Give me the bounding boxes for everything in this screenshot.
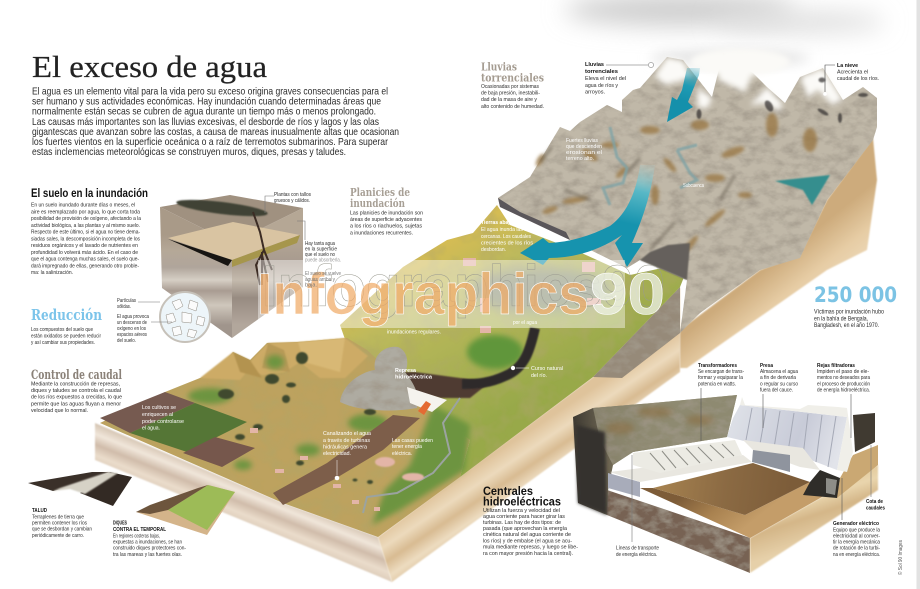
text: diques: tra las mareas y las fuertes olas.: [113, 552, 182, 558]
heading: centrales: Centrales: [483, 484, 533, 498]
label: presa: o regular su curso: [760, 382, 798, 388]
soil right face: [232, 208, 303, 338]
text: centrales: [483, 508, 578, 557]
label: transformadores: Se encargan de trans-: [698, 369, 744, 375]
heading: suelo: El suelo en la inundación: [31, 188, 148, 200]
illustration: soil cube: [160, 195, 305, 338]
label: generador eléctrico: Generador eléctrico: [833, 521, 879, 527]
snow haze on peaks: [655, 48, 843, 112]
strata: upper right face: [680, 138, 877, 368]
text: reducción: y así cambiar sus propiedades.: [31, 340, 95, 346]
title: El exceso de agua: [32, 49, 267, 84]
callout: la nieve: Acrecienta el: [837, 70, 868, 76]
label: transformadores: Transformadores: [698, 363, 737, 369]
label: generador eléctrico: Equipo que produce la: [833, 528, 881, 534]
dam wall: [727, 405, 847, 470]
label: cultivos: [142, 405, 184, 432]
intro text: El agua es un elemento vital para la vida pero su exceso origina graves consecuencias para el: [32, 86, 388, 98]
strata: front left face: [95, 423, 392, 582]
labels: soil cube: gruesos y cálidos.: [274, 198, 310, 204]
label: presa: [760, 363, 799, 428]
label: tierras abajo: Tierras abajo: [481, 220, 513, 226]
text: control de caudal: de los ríos expuestos a crecidas, lo que: [31, 395, 122, 401]
illustration: hydroelectric plant: [573, 395, 878, 573]
top layer: [160, 195, 303, 243]
labels: soil cube: El agua provoca: [117, 314, 149, 320]
labels: soil cube: Hay tanta agua: [305, 241, 335, 247]
callout: lluvias torrenciales: Eleva el nivel del: [585, 76, 626, 82]
text: lluvias torrenciales: alto contenido de humedad.: [481, 104, 544, 110]
concrete block: [608, 473, 640, 497]
label: cota de caudales: [866, 445, 885, 512]
label: mountain erosion: Fuertes lluvias: [566, 138, 598, 144]
text: big number: [814, 308, 884, 329]
text: suelo: profundidad lo volverá más ácido. En el caso de: [31, 250, 138, 256]
heading: planicies: [350, 185, 410, 210]
label: cultivos: Los cultivos se: [142, 405, 176, 411]
text: suelo: posibilidad de provisión de oxígeno, afectando a la: [31, 216, 142, 222]
label: transformadores: formar y equiparar la: [698, 375, 744, 381]
text: centrales: mula mediante represas, y luego se libe-: [483, 544, 578, 550]
crop field: brown lower: [183, 437, 255, 467]
text: big number: en la bahía de Bengala,: [814, 316, 868, 322]
small dam: [407, 387, 447, 412]
text: talud: Terraplenes de tierra que: [32, 514, 84, 520]
houses: [250, 258, 601, 511]
dark ridges: [540, 147, 735, 250]
watermark: Infographics: [257, 262, 589, 327]
label: curso natural: Curso natural: [531, 366, 563, 372]
label: cultivos: poder controlarse: [142, 419, 184, 425]
intro text: ser humano y sus actividades económicas. Hay inundación cuando determinadas áreas que: [32, 97, 381, 108]
label: transformadores: [698, 363, 744, 441]
text: lluvias torrenciales: Ocasionadas por sistemas: [481, 84, 539, 90]
text: diques: DIQUES: [113, 520, 127, 526]
label: cultivos: el agua.: [142, 426, 160, 432]
intro text: los fuertes vientos en la superficie oceánica o a raíz de terremotos submarinos. Para superar: [32, 137, 388, 148]
dam rocks: [340, 347, 418, 410]
callout: lluvias torrenciales: Lluvias: [585, 62, 604, 68]
label: presa: a fin de derivarla: [760, 375, 797, 381]
callout: lluvias torrenciales: [585, 62, 654, 96]
label: turbinas: Canalizando el agua: [323, 431, 372, 437]
text: centrales: ra con mayor presión hacia la central).: [483, 551, 573, 557]
text: planicies: Las planicies de inundación son: [350, 210, 423, 216]
cut surface: [168, 222, 300, 260]
text: suelo: [31, 203, 142, 276]
text: planicies: a los ríos o riachuelos, sujetas: [350, 224, 422, 230]
heading: control de caudal: Control de caudal: [31, 368, 122, 383]
text: diques: construido diques protectores con-: [113, 546, 186, 552]
text: talud: TALUD: [32, 508, 47, 514]
text: reducción: [31, 327, 101, 346]
label: rejas: [817, 363, 871, 438]
trees: [218, 352, 376, 484]
label: turbinas: a través de turbinas: [323, 438, 370, 444]
plant label leader: [265, 196, 274, 213]
heading: lluvias torrenciales: [481, 60, 544, 85]
text: reducción: están oxidados se pueden reducir: [31, 334, 101, 340]
glacial lake: [775, 175, 830, 205]
label: tierras abajo: [481, 220, 537, 253]
text: suelo: actividad biológica, a las plantas y al mismo suelo.: [31, 223, 140, 229]
label: rejas: mentos no deseados para: [817, 375, 871, 381]
callout: la nieve: La nieve: [837, 63, 858, 69]
text: talud: permiten contener los ríos: [32, 520, 87, 526]
label: mountain erosion: erosionan el: [566, 150, 602, 156]
label: transformadores: potencia en watts.: [698, 382, 736, 388]
text: centrales: Utilizan la fuerza y velocidad del: [483, 508, 560, 514]
labels on terrain: [142, 138, 705, 480]
rock mass: [573, 395, 737, 515]
soil left face: [160, 207, 232, 338]
labels: soil cube: [117, 192, 341, 344]
label: rejas: de energía hidroeléctrica.: [817, 388, 870, 394]
label: tierras abajo: desbordan.: [481, 247, 506, 253]
text: suelo: ma: la salinización.: [31, 270, 73, 276]
rock band along right edge of the plain: [593, 287, 680, 378]
brown eroded patches: [534, 113, 817, 256]
tree: [253, 212, 272, 285]
river: [462, 328, 535, 384]
wooden floor: [653, 463, 810, 515]
vegetation: [176, 196, 268, 220]
upstream channel: [395, 372, 490, 398]
label: turbinas: [323, 431, 372, 480]
text: suelo: aire es reemplazado por agua, lo que corta toda: [31, 210, 141, 216]
text: lluvias torrenciales: de baja presión, inestabili-: [481, 90, 540, 96]
white strip: [610, 455, 752, 482]
label: generador eléctrico: na en energía eléctrica.: [833, 552, 880, 558]
text: diques: expuestas a inundaciones, se han: [113, 540, 182, 546]
mountain streams: [603, 127, 697, 205]
label: tierras abajo: cercanas. Los caudales: [481, 234, 531, 240]
watermark: 90: [590, 262, 665, 327]
callout: lluvias torrenciales: torrenciales: [585, 69, 618, 75]
left farmland with hills: [100, 338, 470, 537]
label: represa: Represa: [395, 368, 417, 374]
label: líneas de transporte: [616, 455, 659, 558]
crop field: green: [130, 403, 247, 452]
text: control de caudal: velocidad que lo normal.: [31, 408, 88, 414]
label: flood plain: inundaciones regulares.: [387, 330, 441, 336]
intro text: estas inclemencias meteorológicas se construyen muros, diques, presas y taludes.: [32, 147, 346, 158]
intro text: gigantescas que avanzan sobre las costas, a causa de mareas inusualmente altas que ocasionan: [32, 127, 399, 138]
text: big number: Bangladesh, en el año 1970.: [814, 322, 879, 329]
label: represa: hidroeléctrica: [395, 374, 433, 380]
plain: green and yellow fields: [340, 205, 690, 477]
text: suelo: residuos orgánicos y el lavado de nutrientes en: [31, 243, 138, 249]
credit: © Sol 90 Images: [897, 540, 904, 575]
labels: soil cube: espacios aéreos: [117, 332, 147, 338]
callout: lluvias torrenciales: agua de ríos y: [585, 83, 618, 89]
right strata face: [750, 465, 878, 573]
dam crest and buttress: [740, 397, 853, 472]
heading: planicies: inundación: [350, 196, 405, 210]
black water wedge: [168, 239, 232, 266]
text: control de caudal: diques y taludes se controla el caudal: [31, 388, 121, 394]
dark recess: [853, 413, 875, 452]
illustration: flood plain terrain block: [95, 138, 877, 582]
heading: reducción: Reducción: [31, 306, 102, 324]
callout: lluvias torrenciales: arroyos.: [585, 90, 605, 96]
label: represa: [395, 368, 433, 380]
label: casas: Las casas pueden: [392, 438, 433, 444]
dark rock shade: [576, 425, 607, 515]
big number: 250 000: [814, 283, 897, 307]
labels: soil cube: del suelo.: [117, 338, 136, 344]
label: turbinas: electricidad.: [323, 451, 351, 457]
text: lluvias torrenciales: [481, 84, 544, 110]
talud illustration: [28, 472, 132, 506]
watermark: Infographics90: [262, 254, 665, 319]
label: rejas: Rejas filtradoras: [817, 363, 855, 369]
arrow: floods descending: [520, 165, 655, 267]
heading: centrales: hidroeléctricas: [483, 495, 561, 509]
right top plane: [640, 445, 878, 538]
strata: front right face: [378, 287, 680, 582]
dam outlet: [418, 401, 431, 415]
road stream: [363, 398, 460, 513]
text: control de caudal: [31, 382, 122, 414]
text: suelo: que el agua contenga muchas sales, el suelo que-: [31, 257, 139, 263]
label: tierras abajo: El agua inunda las áreas: [481, 227, 537, 233]
text: suelo: Respecto de este último, si el agua no tiene dema-: [31, 230, 140, 236]
label: líneas de transporte: de energía eléctrica.: [616, 552, 657, 558]
label: casas: [392, 438, 433, 457]
label: generador eléctrico: de rotación de la turbi-: [833, 546, 880, 552]
dark cut faces: [498, 198, 690, 280]
label: rejas: Impiden el paso de ele-: [817, 369, 869, 375]
text: centrales: turbinas. Las hay de dos tipos: de: [483, 520, 561, 526]
text: control de caudal: Mediante la construcción de represas,: [31, 382, 120, 388]
label: mountain erosion: [566, 138, 602, 162]
intro text: Las causas más importantes son las lluvias excesivas, el desborde de ríos y lagos y las olas: [32, 117, 379, 128]
grey intake block: [752, 450, 790, 472]
text: suelo: En un suelo inundado durante días o meses, el: [31, 203, 135, 209]
rocky peaks: [696, 78, 868, 123]
label: presa: Presa: [760, 363, 774, 369]
label: flood plain: [387, 320, 538, 336]
dam apron: [743, 440, 820, 470]
label: casas: eléctrica.: [392, 451, 412, 457]
brown mottling on rock: [606, 407, 714, 434]
clouds: [565, 0, 885, 66]
label: mountain erosion: que descienden: [566, 144, 602, 150]
text: centrales: pasada (que aprovechan la energía: [483, 526, 568, 532]
callout: la nieve: caudal de los ríos.: [837, 76, 879, 82]
labels: soil cube: un descenso de: [117, 320, 147, 326]
text: reducción: Los compuestos del suelo que: [31, 327, 93, 333]
text: diques: [113, 520, 186, 558]
label: cota de caudales: caudales: [866, 506, 885, 512]
label: casas: tener energía: [392, 444, 423, 450]
label: generador eléctrico: tir la energía mecánica: [833, 540, 881, 546]
label: rejas: el proceso de producción: [817, 382, 870, 388]
illustration: mountains: [498, 48, 877, 333]
text: talud: que se desbordan y cambian: [32, 526, 92, 532]
callout: la nieve: [823, 63, 879, 96]
cut channel: [273, 415, 420, 505]
labels: soil cube: que el suelo no: [305, 252, 335, 258]
crop field: brown upper: [100, 392, 195, 433]
label: curso natural: [511, 366, 563, 379]
label: mountain erosion: terreno alto.: [566, 156, 594, 162]
text: talud: periódicamente de carro.: [32, 533, 84, 539]
turbine generator: [803, 470, 840, 498]
flood water haze: [470, 268, 610, 312]
intro text: normalmente están secas se cubren de agua durante un tiempo más o menos prolongado.: [32, 107, 376, 118]
page edge strip: [916, 0, 920, 589]
label: líneas de transporte: Líneas de transporte: [616, 546, 659, 552]
text: centrales: agua corriente para hacer girar las: [483, 514, 565, 520]
label: subcuenca: Subcuenca: [683, 183, 705, 189]
intro text: [32, 86, 399, 158]
text: lluvias torrenciales: dad de la masa de aire y: [481, 97, 537, 103]
green patches: [188, 335, 523, 525]
labels: soil cube: aguas arriba y: [305, 277, 335, 283]
labels: soil cube: Partículas: [117, 298, 136, 304]
label: cota de caudales: Cota de: [866, 499, 883, 505]
text: planicies: a inundaciones recurrentes.: [350, 230, 413, 236]
label: generador eléctrico: [833, 478, 881, 558]
dike illustration: [136, 485, 235, 535]
hills: [200, 338, 368, 380]
text: talud: [32, 508, 92, 539]
labels: soil cube: oxígeno en los: [117, 326, 146, 332]
text: diques: CONTRA EL TEMPORAL: [113, 527, 166, 533]
heading: lluvias torrenciales: Lluvias: [481, 60, 517, 74]
label: generador eléctrico: electricidad al conver-: [833, 534, 880, 540]
label: presa: Almacena el agua: [760, 369, 799, 375]
power house: [633, 440, 742, 473]
front brown face: [607, 490, 750, 573]
label: turbinas: hidráulicas genera: [323, 444, 368, 450]
text: big number: Víctimas por inundación hubo: [814, 308, 884, 316]
labels: soil cube: sólidas.: [117, 304, 131, 310]
text: diques: En regiones costeras bajas,: [113, 534, 160, 540]
text: centrales: cinética natural del agua corriente de: [483, 532, 571, 538]
icon: magnified soil particles: [138, 292, 210, 342]
text: planicies: [350, 210, 423, 236]
labels: soil cube: El suelo se vuelve: [305, 271, 341, 277]
labels: soil cube: puede absorberla.: [305, 258, 341, 264]
label: tierras abajo: crecientes de los ríos: [481, 240, 533, 246]
arrow: upper rainfall: [667, 68, 700, 122]
label: flood plain: por el agua: [513, 320, 538, 326]
heading: planicies: Planicies de: [350, 185, 410, 199]
text: control de caudal: permite que las aguas fluyan a menor: [31, 402, 121, 408]
text: suelo: dará impregnado de ellas, generando otro proble-: [31, 264, 139, 270]
label: curso natural: del río.: [531, 373, 547, 379]
water label leader: [297, 221, 305, 240]
heading: centrales: [483, 484, 561, 509]
labels: soil cube: baja.: [305, 282, 317, 288]
labels: soil cube: en la superficie: [305, 246, 337, 252]
text: centrales: los ríos) y de embalse (el agua se acu-: [483, 538, 572, 544]
label: presa: fuera del cauce.: [760, 388, 793, 394]
labels: soil cube: Plantas con tallos: [274, 192, 311, 198]
text: suelo: siadas sales, la descomposición incompleta de los: [31, 236, 140, 242]
text: planicies: áreas de superficie adyacentes: [350, 217, 422, 223]
label: cultivos: enriquecen al: [142, 412, 173, 418]
heading: lluvias torrenciales: torrenciales: [481, 71, 544, 85]
